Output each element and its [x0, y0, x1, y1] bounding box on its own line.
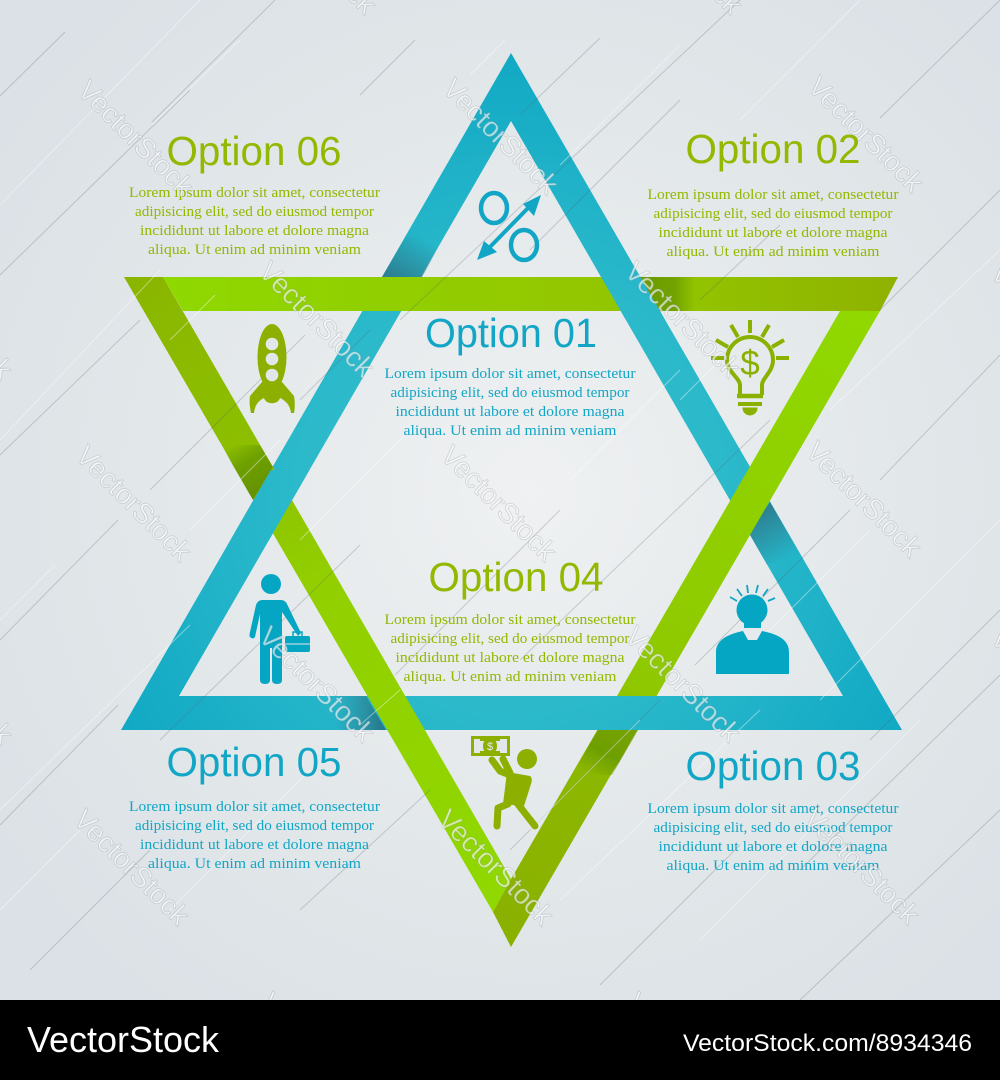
option 04 block: aliqua. Ut enim ad minim veniam: [404, 669, 617, 685]
option 01 block: Lorem ipsum dolor sit amet, consectetur: [384, 366, 636, 382]
option 03 block: aliqua. Ut enim ad minim veniam: [666, 858, 880, 874]
watermarks: VectorStock: [435, 439, 563, 568]
blue triangle: [121, 53, 902, 730]
watermarks: VectorStock: [437, 72, 565, 201]
blue band shadows: [330, 236, 801, 730]
icon: man lifting banknote: [471, 736, 537, 826]
option 03 block: Lorem ipsum dolor sit amet, consectetur: [648, 801, 899, 817]
option 03 block: incididunt ut labore et dolore magna: [658, 839, 888, 855]
option 04 block: adipisicing elit, sed do eiusmod tempor: [390, 631, 630, 647]
option 03 block: Option 03: [686, 743, 860, 789]
option 02 block: incididunt ut labore et dolore magna: [658, 225, 888, 241]
option 06 block: aliqua. Ut enim ad minim veniam: [148, 242, 362, 258]
watermarks: VectorStock: [432, 803, 560, 932]
watermarks: VectorStock: [72, 74, 200, 203]
option 05 block: Lorem ipsum dolor sit amet, consectetur: [129, 799, 380, 815]
footer bar: VectorStock: [27, 1019, 220, 1060]
icon: man lifting banknote: $: [487, 741, 493, 753]
option 01 block: adipisicing elit, sed do eiusmod tempor: [390, 385, 630, 401]
option 02 block: Option 02: [686, 126, 860, 172]
option 06 block: Lorem ipsum dolor sit amet, consectetur: [129, 185, 380, 201]
option 01 block: Option 01: [425, 310, 597, 356]
icon: light bulb with dollar: $: [740, 344, 760, 383]
watermarks: VectorStock: [619, 255, 747, 384]
watermarks: VectorStock: [802, 70, 930, 199]
option 04 block: incididunt ut labore et dolore magna: [396, 650, 625, 666]
watermarks: VectorStock: [253, 620, 381, 749]
option 05 block: incididunt ut labore et dolore magna: [140, 837, 370, 853]
icon: percent with arrow: [477, 193, 541, 260]
option 05 block: aliqua. Ut enim ad minim veniam: [148, 856, 362, 872]
option 05 block: Option 05: [166, 739, 342, 785]
option 02 block: adipisicing elit, sed do eiusmod tempor: [654, 206, 893, 222]
option 03 block: adipisicing elit, sed do eiusmod tempor: [654, 820, 893, 836]
watermarks: VectorStock: [70, 439, 198, 568]
option 01 block: [384, 310, 636, 439]
icon: man with briefcase: [250, 574, 310, 684]
watermarks: VectorStock: [800, 435, 928, 564]
option 04 block: [384, 554, 636, 685]
watermarks: VectorStock: [68, 803, 196, 932]
option 02 block: [648, 126, 899, 260]
option 01 block: incididunt ut labore et dolore magna: [396, 404, 625, 420]
watermarks: VectorStock: [798, 802, 926, 931]
blue overlaps above green: [230, 270, 666, 730]
option 04 block: Option 04: [428, 554, 604, 600]
footer bar: VectorStock.com/8934346: [683, 1030, 972, 1057]
star ribbon: [121, 53, 902, 947]
option 04 block: Lorem ipsum dolor sit amet, consectetur: [384, 612, 636, 628]
option 06 block: incididunt ut labore et dolore magna: [140, 223, 370, 239]
option 06 block: Option 06: [166, 128, 342, 174]
footer bar: [0, 1000, 1000, 1080]
watermarks: VectorStock: [253, 255, 381, 384]
icon: light bulb with dollar: [711, 320, 789, 415]
option 01 block: aliqua. Ut enim ad minim veniam: [404, 423, 617, 439]
option 06 block: adipisicing elit, sed do eiusmod tempor: [135, 204, 374, 220]
green band shadows: [221, 277, 696, 775]
watermarks: VectorStock: [619, 620, 747, 749]
option 05 block: adipisicing elit, sed do eiusmod tempor: [135, 818, 374, 834]
option 06 block: [129, 128, 380, 258]
option 02 block: aliqua. Ut enim ad minim veniam: [666, 244, 880, 260]
green triangle: [124, 277, 898, 947]
option 03 block: [648, 743, 899, 874]
option 02 block: Lorem ipsum dolor sit amet, consectetur: [648, 187, 899, 203]
icon: person with bulb head: [716, 585, 789, 674]
option 05 block: [129, 739, 380, 872]
icon: rocket: [250, 324, 295, 413]
